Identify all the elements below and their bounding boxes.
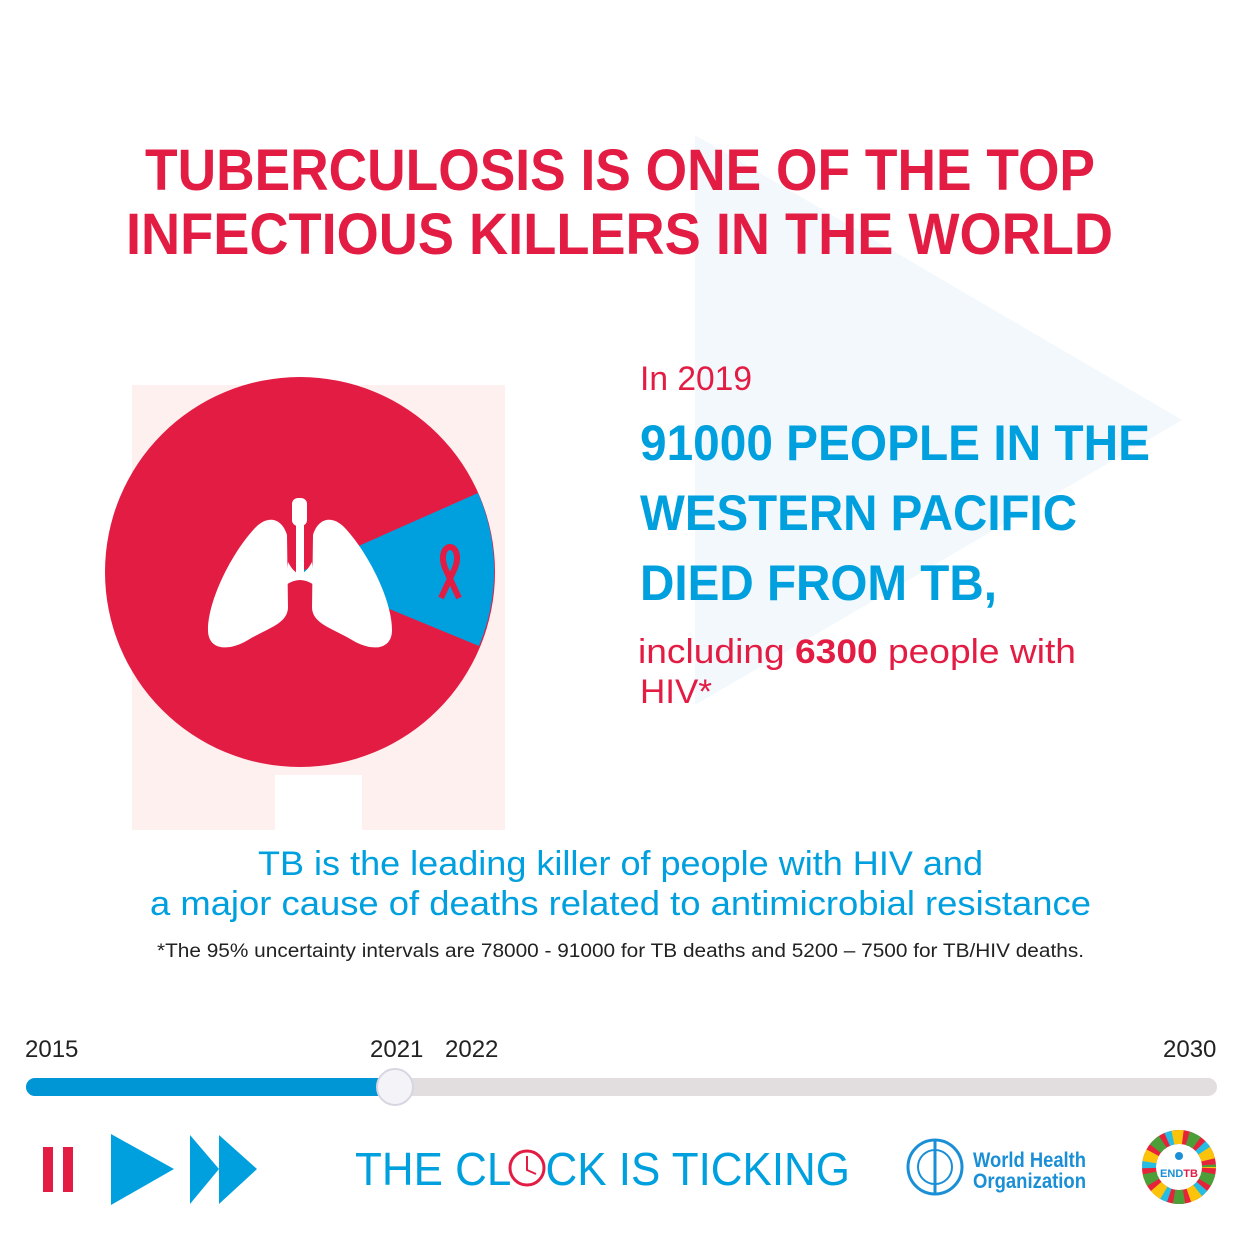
icon: lungs bbox=[208, 498, 392, 647]
END TB logo: ENDTB bbox=[1160, 1168, 1198, 1180]
stats text: HIV* bbox=[640, 673, 712, 711]
WHO logo bbox=[908, 1140, 1086, 1194]
timeline: 2015 bbox=[25, 1036, 78, 1063]
stats text: 91000 PEOPLE IN THE bbox=[640, 415, 1150, 471]
END TB logo bbox=[1149, 1137, 1209, 1197]
icon: play bbox=[111, 1134, 174, 1205]
pie chart bbox=[105, 377, 495, 767]
background pink bars bbox=[132, 385, 505, 830]
icon: red ribbon bbox=[441, 547, 459, 598]
stats text: including 6300 people with bbox=[638, 633, 1076, 671]
icon: fast forward bbox=[190, 1135, 257, 1204]
title: TUBERCULOSIS IS ONE OF THE TOP bbox=[145, 138, 1095, 203]
timeline bbox=[25, 1036, 1217, 1105]
timeline: 2030 bbox=[1163, 1036, 1216, 1063]
footnote: *The 95% uncertainty intervals are 78000 - 91000 for TB deaths and 5200 – 7500 for TB/HIV deaths. bbox=[157, 941, 1084, 962]
summary text bbox=[150, 845, 1091, 923]
tagline: THE CLOCK IS TICKING bbox=[355, 1143, 850, 1195]
WHO logo: Organization bbox=[973, 1170, 1086, 1193]
timeline: 2022 bbox=[445, 1036, 498, 1063]
stats text: DIED FROM TB, bbox=[640, 555, 997, 611]
stats text: WESTERN PACIFIC bbox=[640, 485, 1077, 541]
summary text: TB is the leading killer of people with HIV and bbox=[258, 845, 983, 883]
stats text bbox=[638, 360, 1150, 711]
title: INFECTIOUS KILLERS IN THE WORLD bbox=[126, 202, 1113, 267]
WHO logo: World Health bbox=[973, 1149, 1086, 1172]
icon: pause bbox=[43, 1147, 73, 1192]
summary text: a major cause of deaths related to antimicrobial resistance bbox=[150, 885, 1091, 923]
timeline: 2021 bbox=[370, 1036, 423, 1063]
background play triangle bbox=[695, 135, 1182, 705]
stats text: In 2019 bbox=[640, 360, 752, 398]
title bbox=[126, 138, 1113, 267]
